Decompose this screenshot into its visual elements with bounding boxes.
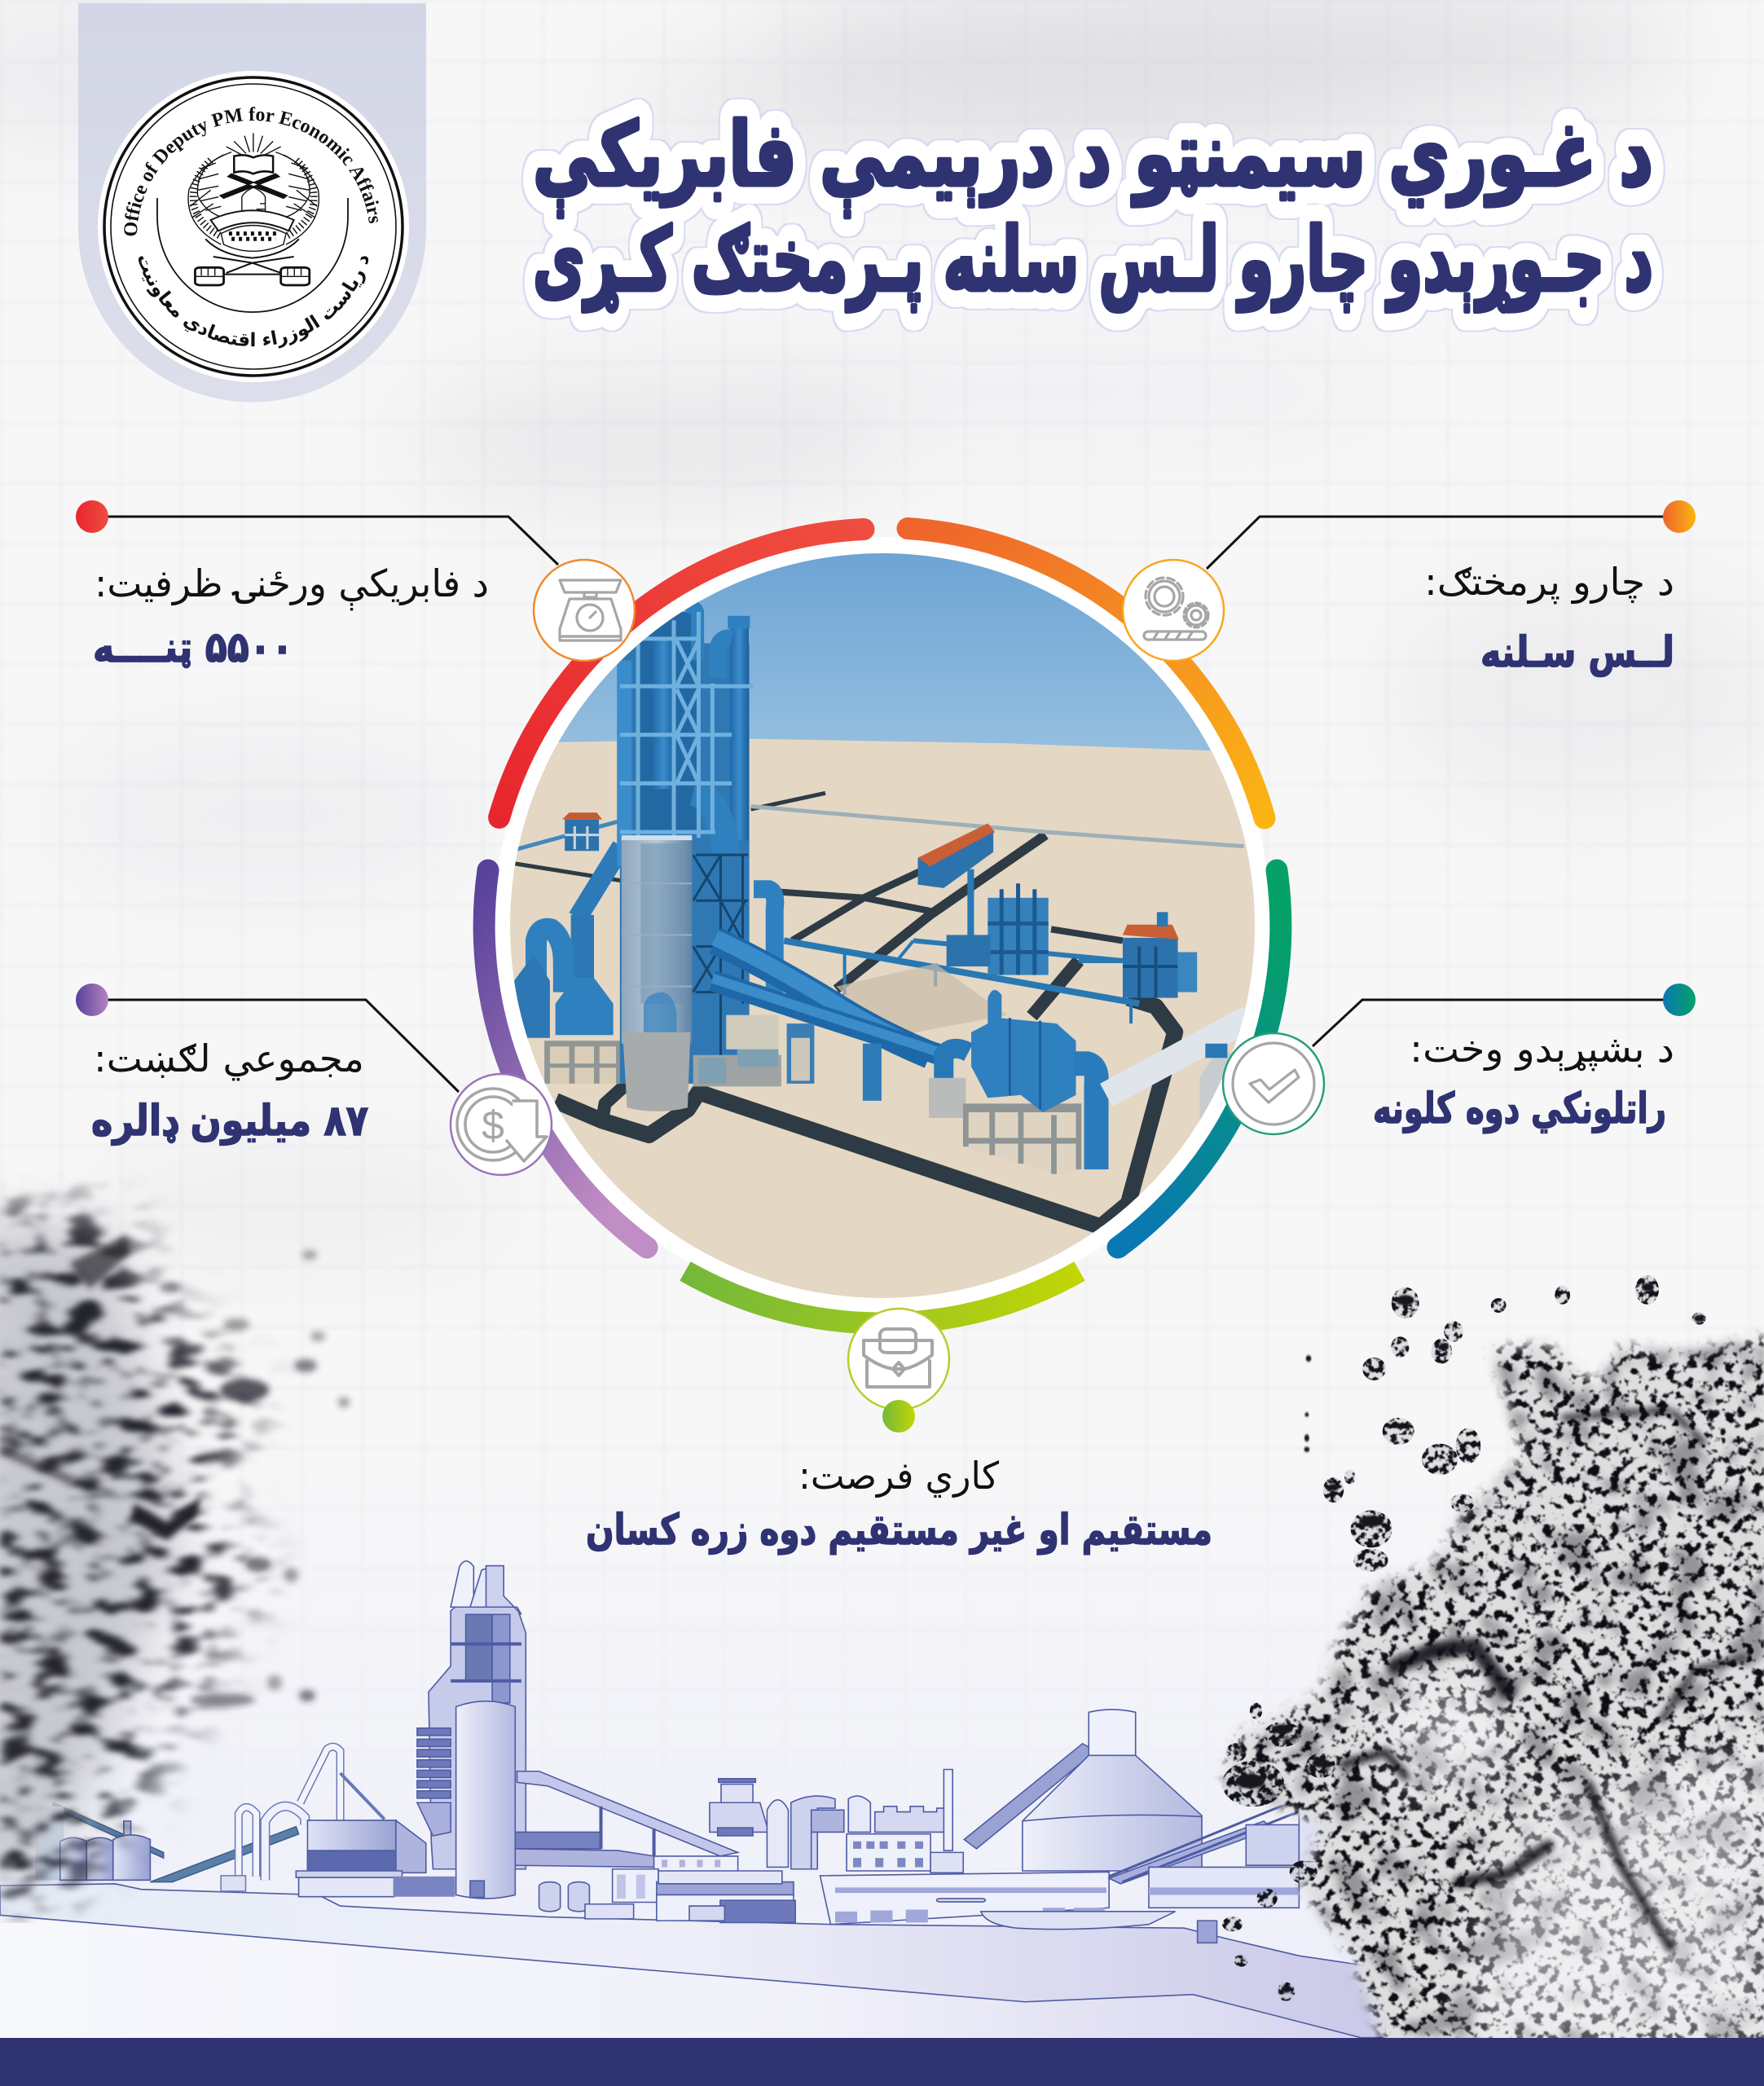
bag filter xyxy=(929,990,1097,1175)
text: investment xyxy=(91,1036,368,1146)
text: completion xyxy=(1373,1027,1674,1133)
central buildings xyxy=(585,1856,795,1922)
title text xyxy=(533,104,1653,312)
text: capacity: د فابریکې ورځنۍ ظرفیت: xyxy=(95,561,489,611)
storage silo xyxy=(964,1710,1202,1871)
text: jobs xyxy=(586,1454,1212,1555)
left silos and conveyors xyxy=(35,1802,299,1882)
central factory photo xyxy=(490,535,1288,1318)
dot teal xyxy=(1663,984,1696,1016)
arc lime xyxy=(685,1271,1080,1323)
arc orange xyxy=(908,528,1265,818)
long warehouse xyxy=(820,1872,1176,1930)
icon: dollar: $ xyxy=(482,1102,504,1148)
text: jobs: مستقیم او غیر مستقیم دوه زره کسان xyxy=(586,1506,1212,1555)
text: completion: راتلونکي دوه کلونه xyxy=(1373,1085,1666,1133)
left mill xyxy=(514,847,622,1084)
icon: gears xyxy=(1123,560,1224,661)
right conveyor and block xyxy=(1109,1792,1361,1943)
right cement pile xyxy=(1206,1255,1764,2045)
left blurred dust xyxy=(0,1173,359,1923)
icon: dollar xyxy=(451,1074,552,1175)
arc purple xyxy=(484,870,647,1248)
connector: check xyxy=(1313,1000,1679,1046)
emblem xyxy=(188,133,319,285)
far buildings xyxy=(562,812,1197,998)
icon: check xyxy=(1223,1033,1324,1134)
icon: scale xyxy=(534,560,635,661)
coloured arc ring xyxy=(484,528,1281,1323)
ducts xyxy=(712,938,941,1055)
main tower xyxy=(620,607,781,1111)
white ring xyxy=(494,537,1271,1314)
seal top text: Office of Deputy PM for Economic Affairs xyxy=(124,107,379,236)
dot orange xyxy=(1663,500,1696,533)
text: jobs: کاري فرصت: xyxy=(798,1454,999,1498)
text: investment: مجموعي لګښت: xyxy=(94,1036,364,1081)
preheater tower xyxy=(417,1561,526,1899)
text: schedule xyxy=(1424,560,1674,677)
shadows xyxy=(836,963,1007,1038)
scattered debris xyxy=(1222,1275,1706,2001)
text: capacity xyxy=(93,561,489,672)
logo tab xyxy=(78,3,426,403)
factory line illustration xyxy=(0,1561,1386,2038)
seal: office of deputy PM for economic affairs xyxy=(98,71,409,382)
text: schedule: د چارو پرمختګ: xyxy=(1424,560,1674,605)
dot red xyxy=(76,500,108,533)
ground strips xyxy=(0,1884,1386,2038)
icon: briefcase xyxy=(848,1309,949,1410)
connector: dollar xyxy=(92,1000,459,1092)
dot purple xyxy=(76,984,108,1016)
kiln belts xyxy=(515,1771,738,1912)
title halo xyxy=(533,104,1653,312)
plant machinery xyxy=(710,1769,963,1873)
text: completion: د بشپړېدو وخت: xyxy=(1410,1027,1674,1072)
arc red xyxy=(499,530,864,817)
connector: gears xyxy=(1207,517,1679,569)
title xyxy=(533,104,1653,312)
text: capacity: ۵۵۰۰ ټنــــه xyxy=(93,623,293,672)
arc teal xyxy=(1118,870,1281,1248)
duct supports xyxy=(726,1015,882,1101)
text: schedule: لــس سـلنه xyxy=(1480,628,1674,677)
pipeline xyxy=(784,940,1139,1023)
connector: scale xyxy=(92,517,558,565)
white pipe xyxy=(1106,1018,1249,1095)
left process building xyxy=(296,1820,455,1897)
text: investment: ۸۷ میلیون ډالره xyxy=(91,1097,368,1146)
seal bottom text: د ریاست الوزراء اقتصادي معاونیت xyxy=(139,256,368,349)
bottom navy band xyxy=(0,2038,1764,2086)
dot lime xyxy=(882,1400,915,1432)
arched pipes xyxy=(221,1747,385,1891)
